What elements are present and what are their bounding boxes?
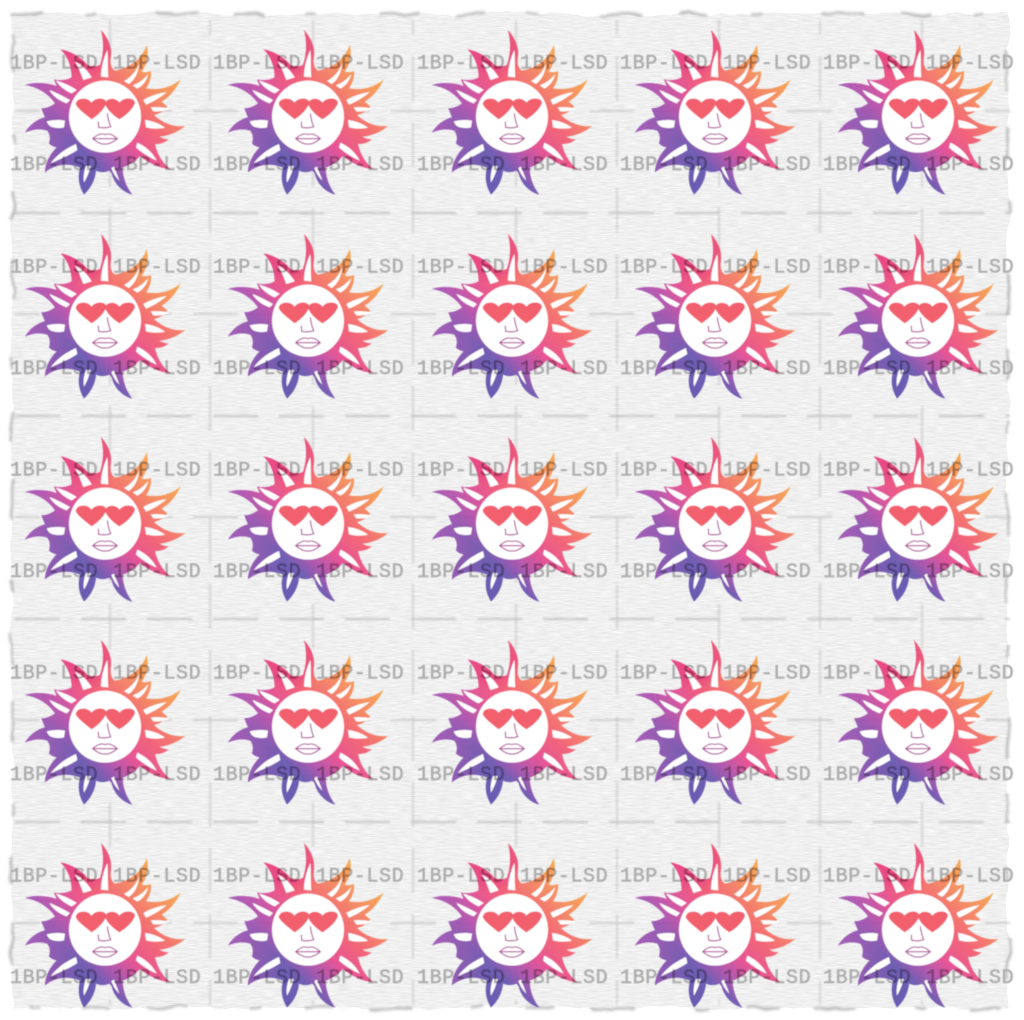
tile row 4 column 3	[417, 640, 608, 805]
tile row 4 column 2: 1BP-LSD	[213, 764, 301, 787]
tile row 2 column 4	[620, 234, 811, 399]
tile row 2 column 3	[417, 234, 608, 399]
tile row 1 column 5: 1BP-LSD	[926, 154, 1014, 177]
tile row 4 column 4: 1BP-LSD	[620, 764, 708, 787]
tile row 2 column 3: 1BP-LSD	[520, 358, 608, 381]
tile row 1 column 3: 1BP-LSD	[417, 52, 505, 76]
tile row 4 column 4	[620, 640, 811, 805]
tile row 4 column 3: 1BP-LSD	[520, 662, 608, 686]
tile row 1 column 1: 1BP-LSD	[10, 154, 98, 177]
tile row 2 column 1: 1BP-LSD	[10, 358, 98, 381]
tile row 2 column 4: 1BP-LSD	[620, 358, 708, 381]
tile row 3 column 3: 1BP-LSD	[520, 460, 608, 482]
tile row 2 column 5: 1BP-LSD	[926, 256, 1014, 280]
tile row 1 column 3: 1BP-LSD	[520, 52, 608, 76]
tile row 1 column 1: 1BP-LSD	[113, 154, 201, 177]
tile row 1 column 4: 1BP-LSD	[620, 52, 708, 76]
tile row 4 column 5: 1BP-LSD	[823, 662, 911, 686]
tile row 4 column 5: 1BP-LSD	[823, 764, 911, 787]
tile row 4 column 5: 1BP-LSD	[926, 662, 1014, 686]
tile row 5 column 3	[417, 843, 608, 1008]
tile row 4 column 5: 1BP-LSD	[926, 764, 1014, 787]
tile row 3 column 4	[620, 437, 811, 602]
tile row 4 column 5	[823, 640, 1014, 805]
tile row 2 column 1	[10, 234, 201, 399]
tile row 1 column 4: 1BP-LSD	[620, 154, 708, 177]
tile row 1 column 5: 1BP-LSD	[926, 52, 1014, 76]
tile row 5 column 3: 1BP-LSD	[520, 866, 608, 888]
tile row 5 column 4	[620, 843, 811, 1008]
tile row 2 column 1: 1BP-LSD	[10, 256, 98, 280]
tile row 4 column 1: 1BP-LSD	[113, 764, 201, 787]
tile row 4 column 2: 1BP-LSD	[316, 764, 404, 787]
tile row 4 column 2	[213, 640, 404, 805]
tile row 3 column 1: 1BP-LSD	[113, 460, 201, 482]
tile row 4 column 2: 1BP-LSD	[213, 662, 301, 686]
tile row 5 column 5	[823, 843, 1014, 1008]
tile row 1 column 5: 1BP-LSD	[823, 154, 911, 177]
tile row 4 column 3: 1BP-LSD	[520, 764, 608, 787]
tile row 3 column 4: 1BP-LSD	[620, 561, 708, 584]
tile row 2 column 3: 1BP-LSD	[417, 256, 505, 280]
tile row 4 column 4: 1BP-LSD	[620, 662, 708, 686]
tile row 1 column 3: 1BP-LSD	[520, 154, 608, 177]
tile row 1 column 3	[417, 30, 608, 195]
tile row 2 column 5: 1BP-LSD	[823, 358, 911, 381]
tile row 1 column 4: 1BP-LSD	[723, 154, 811, 177]
tile row 4 column 3: 1BP-LSD	[417, 662, 505, 686]
tile row 3 column 5: 1BP-LSD	[926, 561, 1014, 584]
tile row 1 column 4: 1BP-LSD	[723, 52, 811, 76]
tile row 1 column 2	[213, 30, 404, 195]
tile row 1 column 1: 1BP-LSD	[10, 52, 98, 76]
tile row 5 column 5: 1BP-LSD	[926, 866, 1014, 888]
tile row 1 column 2: 1BP-LSD	[213, 52, 301, 76]
tile row 5 column 2	[213, 843, 404, 1008]
tile row 5 column 3: 1BP-LSD	[417, 866, 505, 888]
tile row 1 column 2: 1BP-LSD	[316, 52, 404, 76]
tile row 2 column 4: 1BP-LSD	[620, 256, 708, 280]
tile row 5 column 2: 1BP-LSD	[316, 866, 404, 888]
tile row 4 column 4: 1BP-LSD	[723, 764, 811, 787]
tile row 5 column 1: 1BP-LSD	[113, 967, 201, 990]
tile row 2 column 3: 1BP-LSD	[520, 256, 608, 280]
tile row 5 column 1: 1BP-LSD	[10, 866, 98, 888]
tile row 2 column 4: 1BP-LSD	[723, 358, 811, 381]
tile row 3 column 2: 1BP-LSD	[316, 561, 404, 584]
tile row 1 column 4	[620, 30, 811, 195]
tile row 5 column 1: 1BP-LSD	[113, 866, 201, 888]
tile row 4 column 1	[10, 640, 201, 805]
tile row 5 column 1: 1BP-LSD	[10, 967, 98, 990]
tile row 3 column 1: 1BP-LSD	[10, 460, 98, 482]
tile row 3 column 2	[213, 437, 404, 602]
tile row 3 column 1: 1BP-LSD	[113, 561, 201, 584]
tile row 1 column 1: 1BP-LSD	[113, 52, 201, 76]
tile row 5 column 5: 1BP-LSD	[823, 866, 911, 888]
tile row 3 column 2: 1BP-LSD	[316, 460, 404, 482]
tile row 5 column 2: 1BP-LSD	[213, 866, 301, 888]
tile row 2 column 1: 1BP-LSD	[113, 358, 201, 381]
tile row 4 column 2: 1BP-LSD	[316, 662, 404, 686]
tile row 3 column 5: 1BP-LSD	[926, 460, 1014, 482]
tile row 4 column 1: 1BP-LSD	[113, 662, 201, 686]
tile row 3 column 5: 1BP-LSD	[823, 460, 911, 482]
tile row 5 column 3: 1BP-LSD	[417, 967, 505, 990]
tile row 4 column 1: 1BP-LSD	[10, 764, 98, 787]
tile row 3 column 3	[417, 437, 608, 602]
tile row 1 column 2: 1BP-LSD	[213, 154, 301, 177]
tile row 5 column 3: 1BP-LSD	[520, 967, 608, 990]
tile row 5 column 1	[10, 843, 201, 1008]
tile row 3 column 5	[823, 437, 1014, 602]
tile row 3 column 2: 1BP-LSD	[213, 460, 301, 482]
tile row 5 column 4: 1BP-LSD	[620, 866, 708, 888]
tile row 5 column 4: 1BP-LSD	[723, 866, 811, 888]
tile row 4 column 1: 1BP-LSD	[10, 662, 98, 686]
tile row 5 column 2: 1BP-LSD	[213, 967, 301, 990]
tile row 3 column 3: 1BP-LSD	[417, 460, 505, 482]
tile row 5 column 5: 1BP-LSD	[823, 967, 911, 990]
tile row 2 column 5	[823, 234, 1014, 399]
tile row 2 column 2	[213, 234, 404, 399]
tile row 3 column 3: 1BP-LSD	[520, 561, 608, 584]
tile row 2 column 5: 1BP-LSD	[926, 358, 1014, 381]
tile row 5 column 4: 1BP-LSD	[620, 967, 708, 990]
tile row 3 column 5: 1BP-LSD	[823, 561, 911, 584]
tile row 5 column 4: 1BP-LSD	[723, 967, 811, 990]
tile row 4 column 4: 1BP-LSD	[723, 662, 811, 686]
tile row 3 column 4: 1BP-LSD	[620, 460, 708, 482]
tile row 4 column 3: 1BP-LSD	[417, 764, 505, 787]
tile row 1 column 3: 1BP-LSD	[417, 154, 505, 177]
tile row 2 column 2: 1BP-LSD	[316, 256, 404, 280]
tile row 5 column 5: 1BP-LSD	[926, 967, 1014, 990]
tile row 1 column 5: 1BP-LSD	[823, 52, 911, 76]
tile row 3 column 1	[10, 437, 201, 602]
tile row 3 column 4: 1BP-LSD	[723, 561, 811, 584]
tile row 2 column 4: 1BP-LSD	[723, 256, 811, 280]
tile row 2 column 2: 1BP-LSD	[213, 358, 301, 381]
tile row 1 column 2: 1BP-LSD	[316, 154, 404, 177]
tile row 2 column 2: 1BP-LSD	[213, 256, 301, 280]
tile row 3 column 1: 1BP-LSD	[10, 561, 98, 584]
tile row 2 column 2: 1BP-LSD	[316, 358, 404, 381]
tile row 1 column 1	[10, 30, 201, 195]
tile row 3 column 2: 1BP-LSD	[213, 561, 301, 584]
tile row 5 column 2: 1BP-LSD	[316, 967, 404, 990]
tile row 3 column 4: 1BP-LSD	[723, 460, 811, 482]
tile row 1 column 5	[823, 30, 1014, 195]
tile row 2 column 3: 1BP-LSD	[417, 358, 505, 381]
tile row 2 column 5: 1BP-LSD	[823, 256, 911, 280]
tile row 3 column 3: 1BP-LSD	[417, 561, 505, 584]
tile row 2 column 1: 1BP-LSD	[113, 256, 201, 280]
